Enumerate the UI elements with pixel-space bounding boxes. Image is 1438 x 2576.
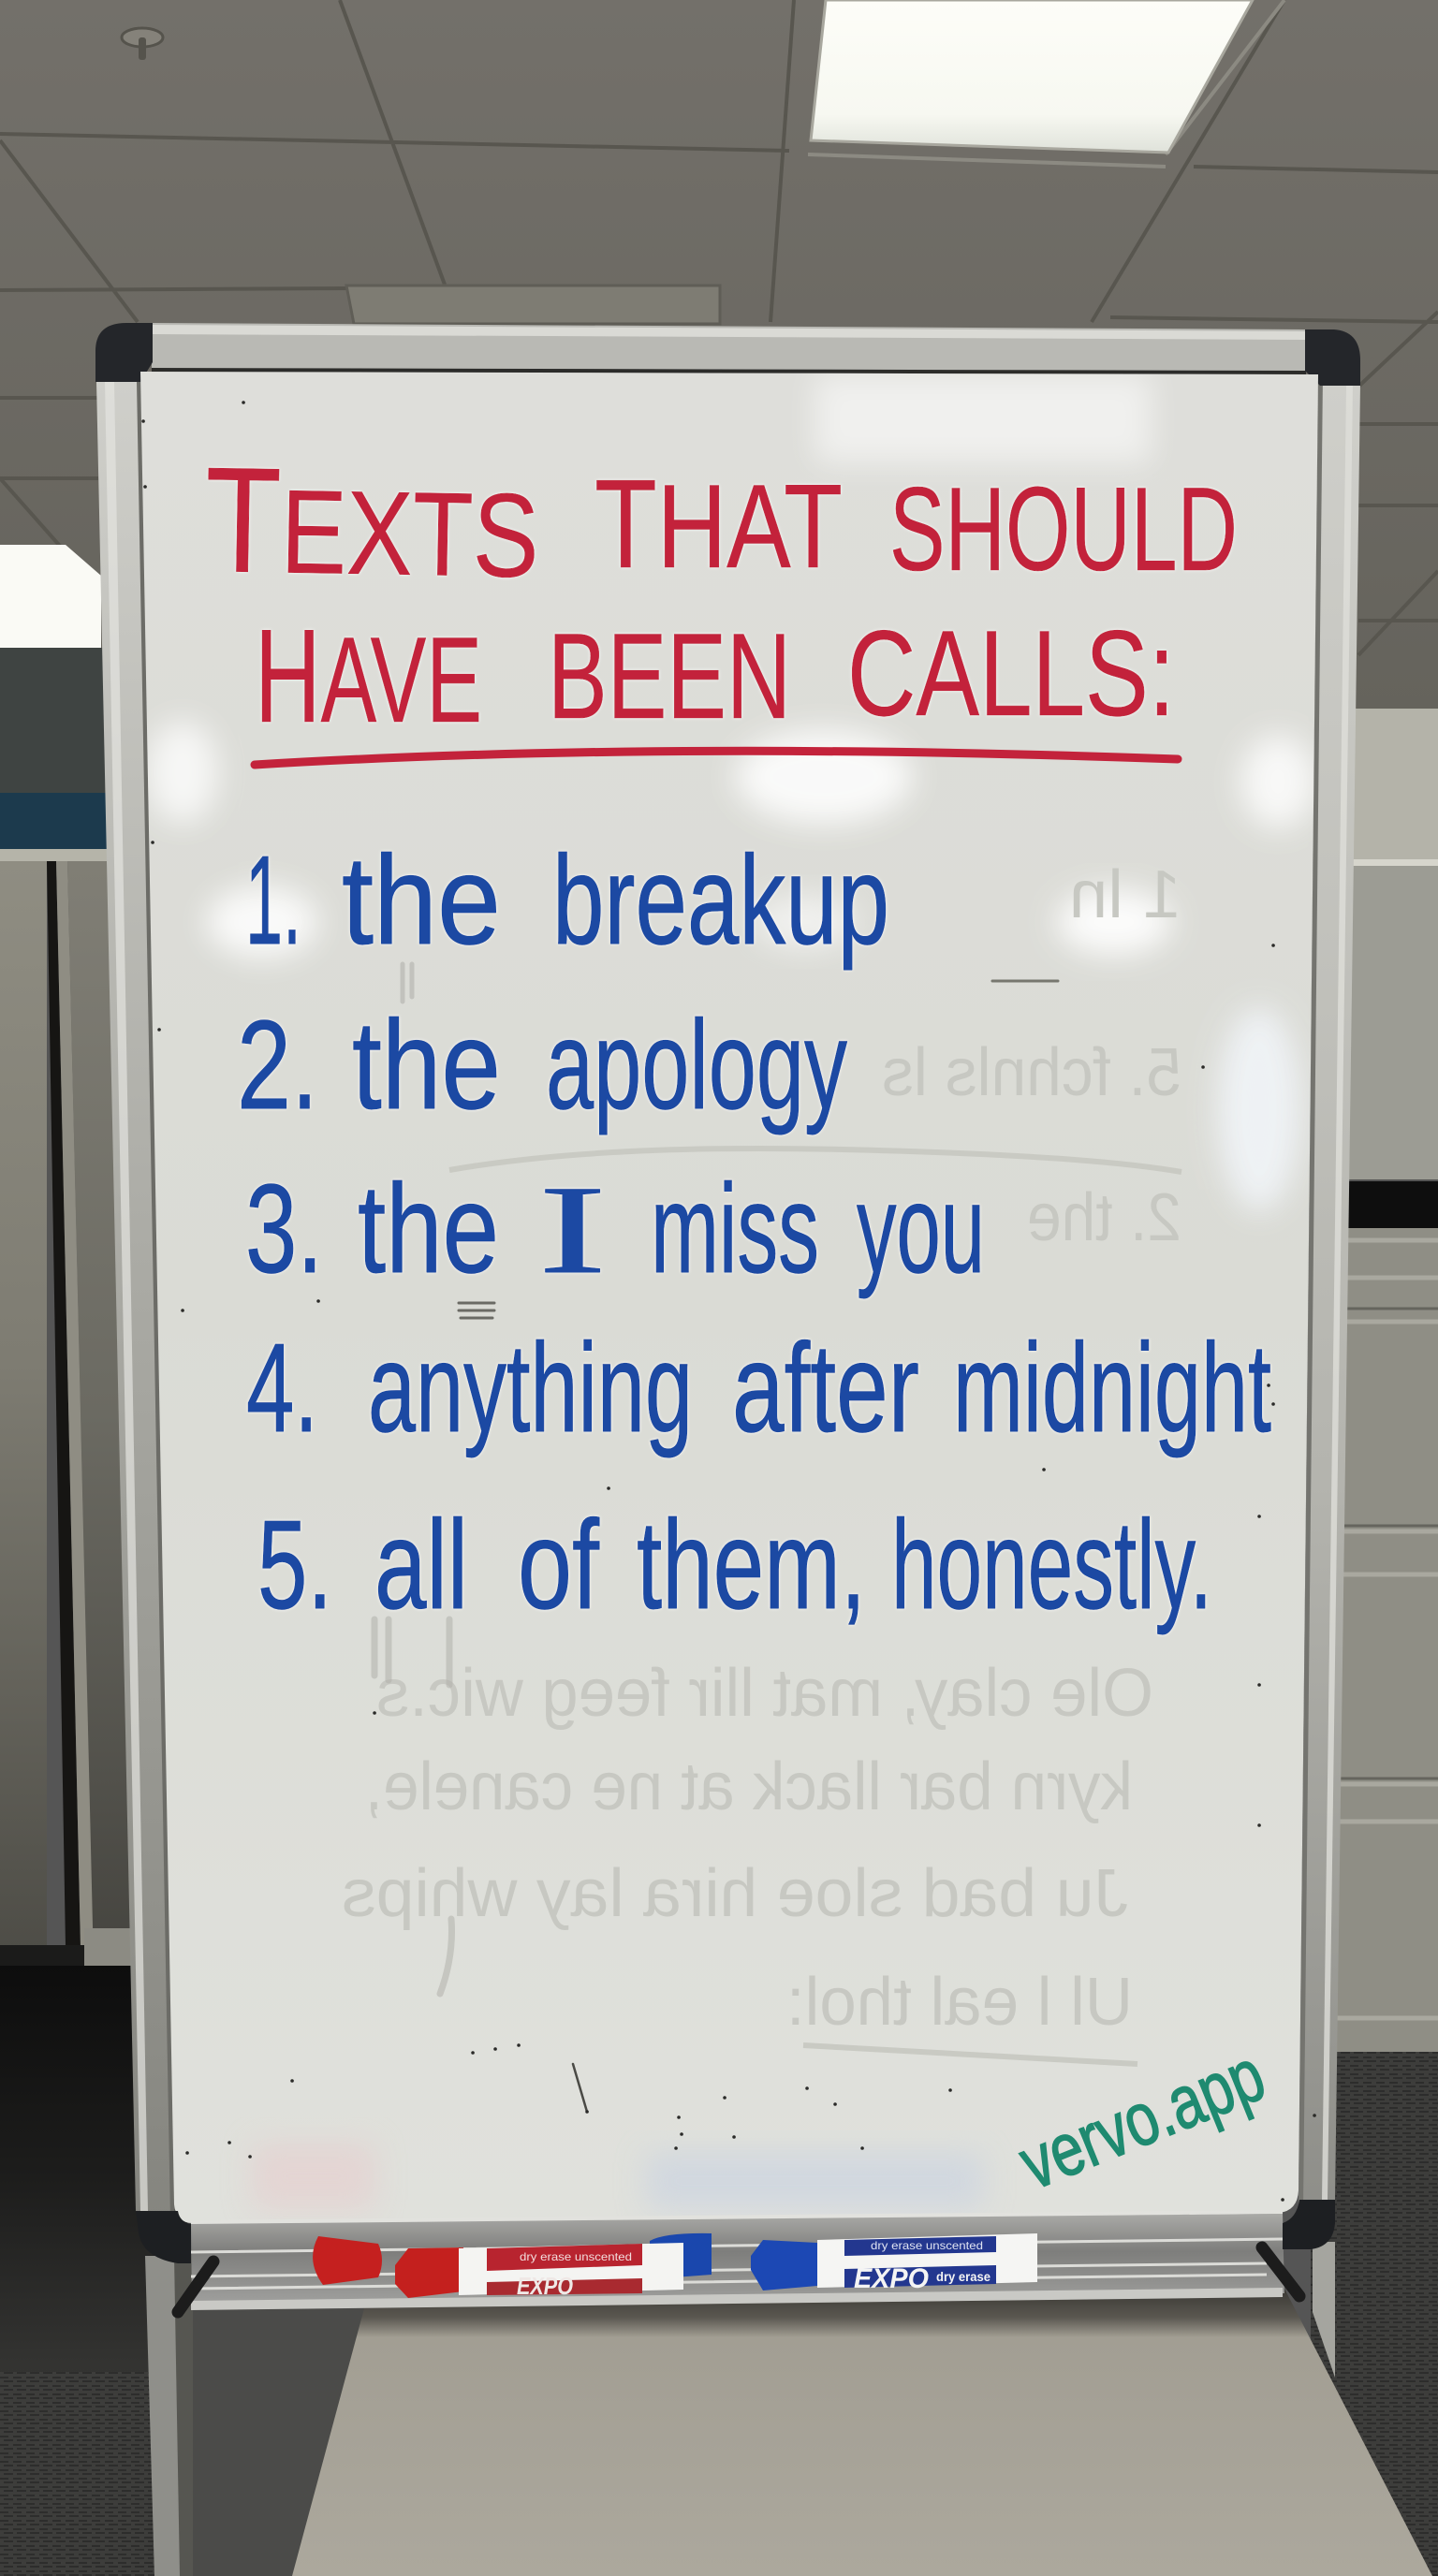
brand handwriting: vervo.app: vervo.app bbox=[1008, 2032, 1276, 2205]
cabinet top below the board bbox=[292, 2289, 1432, 2576]
heading line 1: TEXTS bbox=[203, 435, 540, 608]
whiteboard frame bbox=[96, 323, 1360, 2220]
item 1 bbox=[245, 829, 889, 971]
stand legs bbox=[145, 2242, 1335, 2576]
item 2: apology bbox=[546, 994, 847, 1135]
item 2 bbox=[237, 994, 847, 1135]
item 3: you bbox=[857, 1158, 985, 1299]
item 1: 1. bbox=[245, 829, 301, 971]
ceiling light panel bbox=[811, 0, 1253, 153]
heading line 2: BEEN bbox=[548, 607, 791, 744]
item 4: after bbox=[732, 1317, 919, 1458]
heading bbox=[203, 435, 1238, 608]
blue marker: dry erase unscented bbox=[871, 2239, 983, 2252]
carpet bbox=[0, 1966, 1438, 2576]
heading line 2: CALLS: bbox=[847, 605, 1175, 741]
item 5 bbox=[257, 1494, 1212, 1635]
wall-mounted box behind the board bbox=[346, 285, 720, 324]
item 2: the bbox=[352, 994, 501, 1135]
item 4: anything bbox=[368, 1317, 693, 1458]
heading line 1: THAT bbox=[594, 453, 843, 594]
ghost erased writing: Ul l eal thol: bbox=[786, 1965, 1133, 2040]
loose blue cap bbox=[650, 2233, 712, 2277]
item 3: the bbox=[358, 1158, 499, 1299]
heading line 2: HAVE bbox=[255, 602, 482, 751]
item 1: the bbox=[342, 829, 501, 971]
loose red cap bbox=[313, 2236, 382, 2285]
smudges and streaks bbox=[374, 964, 1058, 2112]
whiteboard surface bbox=[140, 372, 1318, 2223]
red marker bbox=[395, 2243, 683, 2300]
marker specks bbox=[143, 402, 1314, 2219]
item 1: breakup bbox=[552, 829, 889, 971]
item 5: 5. bbox=[257, 1494, 332, 1635]
item 3: miss bbox=[651, 1158, 819, 1299]
left background: light, dark wall and cubicle bbox=[0, 545, 140, 1984]
item 5: all bbox=[374, 1494, 468, 1635]
blue marker bbox=[751, 2233, 1037, 2294]
item 4: midnight bbox=[953, 1317, 1271, 1458]
heading line 2 bbox=[255, 602, 1175, 751]
ceiling bbox=[0, 0, 1438, 711]
right background: wall, fabric panel, cabinets bbox=[1329, 709, 1438, 2052]
item 3: I bbox=[538, 1161, 607, 1300]
ghost erased writing: 1 ln bbox=[1069, 857, 1181, 932]
item 2: 2. bbox=[237, 994, 318, 1135]
item 4: 4. bbox=[246, 1317, 318, 1458]
ghost erased writing: Ju bad sloe hira lay whips bbox=[342, 1856, 1128, 1931]
item 5: honestly. bbox=[891, 1494, 1212, 1635]
item 4 bbox=[246, 1317, 1271, 1458]
ghost erased writing: kyrn bar llack at ne canele, bbox=[365, 1749, 1133, 1824]
ghost erased writing: Ole clay, mat llir feeg wic.s bbox=[376, 1656, 1153, 1731]
item 5: of bbox=[518, 1494, 599, 1635]
frame bottom corner caps bbox=[136, 2200, 1335, 2263]
ghost erased writing: 5. fchnls ls bbox=[882, 1035, 1181, 1110]
heading line 1 bbox=[203, 435, 1238, 608]
sprinkler head bbox=[122, 28, 163, 60]
glare reflections bbox=[147, 374, 1315, 2209]
marker tray bbox=[178, 2212, 1299, 2312]
blue marker: EXPO bbox=[854, 2263, 929, 2294]
list bbox=[237, 829, 1271, 1635]
ghost erased writing: 2. the bbox=[1027, 1180, 1181, 1255]
frame top corner caps bbox=[95, 323, 1360, 386]
item 3: 3. bbox=[245, 1158, 323, 1299]
item 5: them, bbox=[637, 1494, 866, 1635]
blue marker: dry erase bbox=[936, 2269, 990, 2284]
heading underline bbox=[255, 751, 1178, 765]
red marker: dry erase unscented bbox=[520, 2250, 632, 2263]
ghost erased writing bbox=[342, 857, 1181, 2064]
item 3 bbox=[245, 1158, 985, 1300]
red marker: EXPO bbox=[517, 2272, 573, 2300]
heading line 1: SHOULD bbox=[889, 462, 1238, 595]
